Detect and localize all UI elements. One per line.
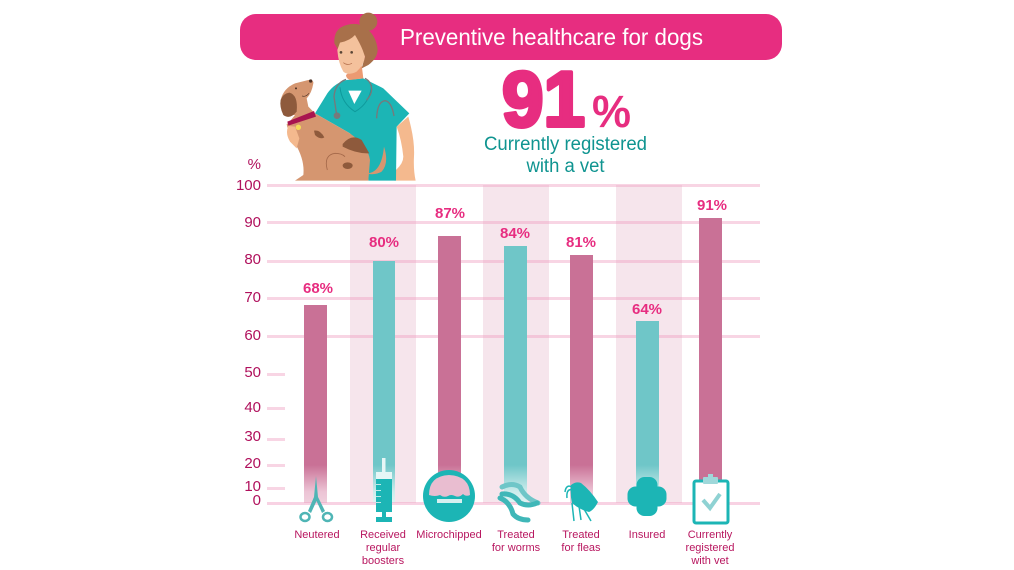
category labels: boosters — [362, 555, 405, 567]
headline statistic: 91 — [502, 55, 585, 143]
background stripes — [350, 185, 682, 503]
category labels: Received — [360, 529, 406, 541]
icon: worms — [500, 484, 538, 520]
category labels: Insured — [629, 529, 665, 541]
dog spots — [314, 130, 369, 169]
bar: boosters 80% — [373, 261, 395, 503]
bar: microchipped 87% — [438, 236, 461, 503]
bar: vet 91% — [699, 218, 722, 503]
category labels: for fleas — [561, 542, 601, 554]
stethoscope — [334, 78, 394, 118]
bar values: 81% — [566, 234, 596, 251]
dog collar — [287, 111, 316, 126]
icon: plaster — [628, 477, 666, 516]
dog body — [287, 113, 370, 181]
headline statistic: % — [592, 86, 631, 137]
category labels: for worms — [492, 542, 541, 554]
icon: syringe — [376, 458, 392, 522]
bar values: 68% — [303, 280, 333, 297]
y axis labels: 0 — [253, 492, 261, 509]
icon: microchip scanner — [423, 470, 475, 522]
category labels: Microchipped — [416, 529, 482, 541]
y axis labels: 50 — [244, 364, 261, 381]
category labels: with vet — [690, 555, 729, 567]
y axis labels: 100 — [236, 177, 261, 194]
category labels — [294, 529, 734, 567]
category labels: Currently — [688, 529, 733, 541]
vet scrubs — [315, 78, 409, 181]
vet neck — [346, 65, 363, 80]
bar values — [303, 197, 727, 318]
dog tail — [368, 147, 386, 174]
y axis labels: 30 — [244, 428, 261, 445]
baseline — [267, 502, 760, 505]
dog face — [295, 79, 312, 96]
icon: flea — [565, 482, 598, 521]
category labels: Treated — [562, 529, 600, 541]
vet shirt — [348, 91, 362, 104]
vet features — [340, 51, 353, 65]
headline statistic: with a vet — [526, 156, 605, 177]
bar values: 80% — [369, 234, 399, 251]
y axis labels: 90 — [244, 214, 261, 231]
y axis labels: 60 — [244, 327, 261, 344]
y axis labels — [236, 156, 261, 509]
headline statistic: Currently registered — [484, 134, 647, 155]
dog leg line — [326, 153, 345, 170]
bar chart — [304, 218, 722, 503]
category labels: Treated — [497, 529, 535, 541]
bar: worms 84% — [504, 246, 527, 503]
bar: insured 64% — [636, 321, 659, 503]
dog tag — [296, 125, 301, 130]
y axis labels: % — [248, 156, 261, 173]
category labels: registered — [686, 542, 734, 554]
y axis labels: 20 — [244, 455, 261, 472]
header banner — [240, 14, 782, 60]
bar: fleas 81% — [570, 255, 593, 503]
bar: neutered 68% — [304, 305, 327, 503]
vet arm — [394, 117, 416, 181]
category labels: Neutered — [294, 529, 340, 541]
vet neckline — [340, 85, 372, 112]
category labels: regular — [366, 542, 400, 554]
bar values: 91% — [697, 197, 727, 214]
y axis labels: 80 — [244, 251, 261, 268]
header banner: Preventive healthcare for dogs — [400, 24, 703, 50]
vet hand on dog — [287, 126, 299, 148]
bar values: 87% — [435, 205, 465, 222]
bar values: 64% — [632, 301, 662, 318]
y axis labels: 10 — [244, 478, 261, 495]
vet face — [337, 35, 365, 74]
y axis gridlines — [267, 184, 760, 490]
y axis labels: 70 — [244, 289, 261, 306]
bar values: 84% — [500, 225, 530, 242]
vet hair — [334, 24, 378, 68]
y axis labels: 40 — [244, 399, 261, 416]
dog ear — [280, 93, 297, 117]
dog head — [281, 80, 315, 124]
vet hair bun — [359, 13, 377, 31]
illustration: vet with dog — [280, 13, 416, 181]
icon: clipboard — [694, 474, 728, 523]
icon: forceps — [300, 476, 332, 521]
headline statistic — [484, 55, 647, 177]
